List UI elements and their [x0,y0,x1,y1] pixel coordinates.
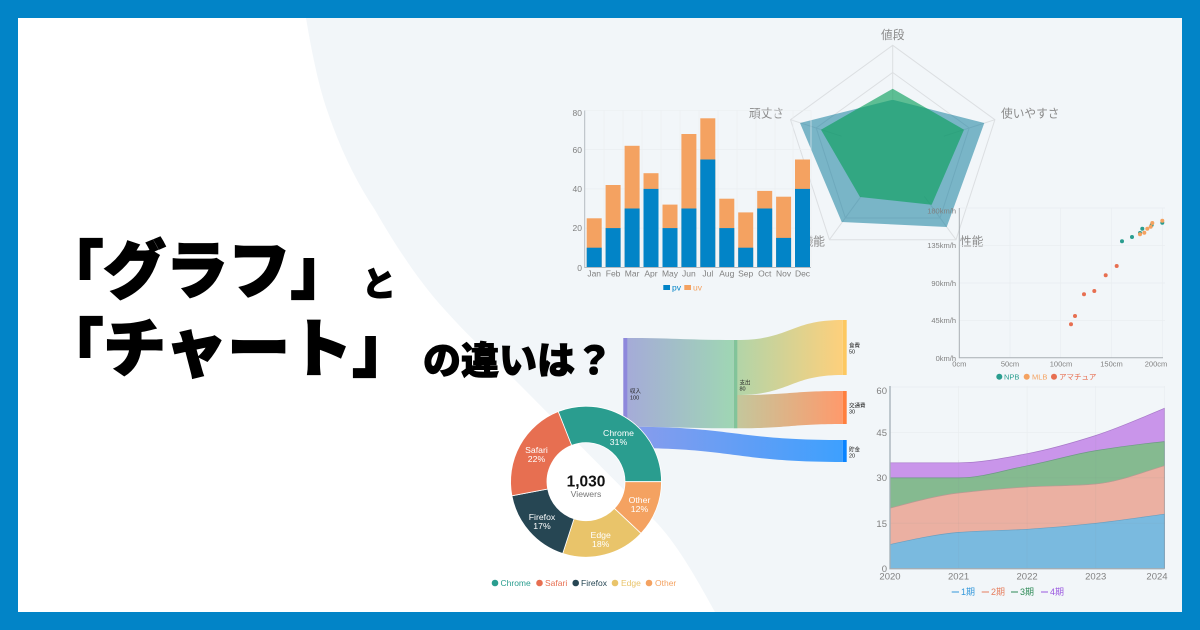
area legend: 4期 [1050,587,1064,597]
scatter legend [996,372,1096,382]
bar chart x axis labels: Apr [644,268,658,278]
stacked area chart [876,386,1168,597]
title [41,236,613,385]
bar chart y axis labels [573,108,582,273]
radar axis labels: 値段 [881,28,905,42]
area legend [952,587,1064,597]
slice: Safari [511,412,572,496]
scatter legend: MLB [1032,372,1047,382]
area y axis labels: 60 [876,386,887,397]
area x axis labels [879,572,1168,582]
sankey labels: 貯金 [849,446,861,454]
sankey link: expense to food [737,320,842,395]
area legend: 2期 [991,587,1005,597]
donut slice labels: 17% [533,521,551,531]
scatter points: NPB [1120,221,1164,243]
area y axis labels: 30 [876,473,887,484]
donut legend: Edge [621,578,641,588]
area legend: 1期 [961,587,975,597]
sankey labels: 20 [849,454,855,460]
area: 1期 [890,514,1164,569]
bar chart y axis labels: 60 [573,145,582,155]
area y axis labels: 0 [882,564,887,575]
area legend: 3期 [1020,587,1034,597]
bar chart y axis labels: 80 [573,108,582,118]
scatter y axis labels: 0km/h [936,354,956,363]
area: 4期 [890,408,1164,569]
bar chart legend: pv [672,282,682,292]
area x axis labels: 2024 [1146,572,1168,582]
donut slice labels: 18% [592,539,610,549]
area x axis labels: 2023 [1085,572,1106,582]
donut legend: Chrome [500,578,531,588]
bar chart x axis labels: Dec [795,268,811,278]
radar axis labels [749,28,1059,248]
donut slice labels: Firefox [529,512,556,522]
scatter points: MLB [1138,219,1164,236]
donut slice labels: 22% [528,454,545,464]
sankey labels: 80 [740,386,746,392]
sankey link: income to expense [627,338,733,428]
sankey link: expense to transport [737,391,842,428]
bar chart x axis labels: Feb [606,268,621,278]
title: と [362,266,396,304]
bar chart y axis labels: 20 [573,223,582,233]
donut slice labels: Chrome [603,428,634,438]
area x axis labels: 2020 [879,572,901,582]
area: 3期 [890,442,1164,569]
donut legend: Other [655,578,676,588]
bar chart x axis labels: Oct [758,268,772,278]
scatter chart [927,206,1167,382]
donut chart [492,406,676,588]
radar chart [749,28,1059,248]
bar chart y axis labels: 0 [577,263,582,273]
donut slice labels: 12% [631,504,648,514]
slice: Firefox [512,489,574,554]
radar axis labels: 頑丈さ [749,108,784,120]
stacked bar chart [573,108,811,292]
radar series: blue [800,100,984,227]
bar chart x axis labels [587,268,811,278]
bar chart x axis labels: Nov [776,268,792,278]
sankey link: income to savings [627,427,842,462]
donut center total: 1,030 [567,474,605,490]
scatter x axis labels: 0cm [952,360,966,368]
scatter y axis labels: 90km/h [931,279,956,288]
sankey diagram [623,320,866,462]
bar chart x axis labels: Jun [682,268,696,278]
donut legend: Safari [545,578,567,588]
title: 「グラフ」 [41,237,353,307]
scatter x axis labels [952,360,1167,368]
bars: pv [587,160,810,267]
donut slice labels [525,428,650,549]
bars: uv [587,118,810,267]
title: の違いは？ [423,341,613,383]
scatter x axis labels: 100cm [1050,360,1072,368]
bar chart x axis labels: Jan [587,268,601,278]
bar chart legend: uv [693,282,703,292]
donut center total [567,474,605,499]
donut legend: Firefox [581,578,608,588]
scatter legend: NPB [1004,372,1019,382]
donut slice labels: 31% [610,437,627,447]
scatter y axis labels [927,206,956,363]
radar axis labels: 使いやすさ [1001,106,1059,120]
area y axis labels [876,386,887,575]
sankey labels: 30 [849,410,855,416]
slice: Chrome [558,406,662,482]
bar chart x axis labels: Sep [738,268,754,278]
radar series: green [821,89,964,205]
area: 2期 [890,466,1164,569]
scatter x axis labels: 200cm [1145,360,1167,368]
donut legend [492,578,676,588]
sankey labels: 収入 [630,388,642,395]
bar chart y axis labels: 40 [573,184,582,194]
donut center total: Viewers [571,489,602,499]
sankey labels: 100 [630,396,639,402]
bar chart x axis labels: May [662,268,679,278]
scatter legend: アマチュア [1059,372,1096,382]
sankey labels: 支出 [740,378,751,386]
sankey labels: 食費 [849,342,861,350]
area x axis labels: 2022 [1017,572,1038,582]
scatter y axis labels: 180km/h [927,206,956,216]
scatter x axis labels: 50cm [1001,360,1019,368]
bar chart x axis labels: Jul [702,268,713,278]
sankey labels [630,342,866,460]
background: light panel with curved edge [306,18,1182,612]
scatter points: amateur [1069,264,1119,326]
scatter y axis labels: 45km/h [931,316,956,325]
sankey nodes [623,338,627,448]
radar axis labels: 性能 [960,234,984,248]
scatter y axis labels: 135km/h [927,241,956,250]
radar axis labels: 機能 [802,234,825,248]
bar chart x axis labels: Aug [719,268,735,278]
area y axis labels: 45 [876,428,887,439]
donut slice labels: Other [629,495,650,505]
bar chart legend [663,282,703,292]
scatter x axis labels: 150cm [1100,360,1123,368]
donut slice labels: Edge [591,530,611,540]
slice: Edge [563,508,641,557]
donut slice labels: Safari [525,445,548,455]
bar chart x axis labels: Mar [625,268,640,278]
sankey labels: 交通費 [849,402,866,410]
slice: Other [614,482,662,533]
title: 「チャート」 [41,315,415,385]
sankey labels: 50 [849,350,855,356]
area x axis labels: 2021 [948,572,969,582]
area y axis labels: 15 [876,519,887,530]
